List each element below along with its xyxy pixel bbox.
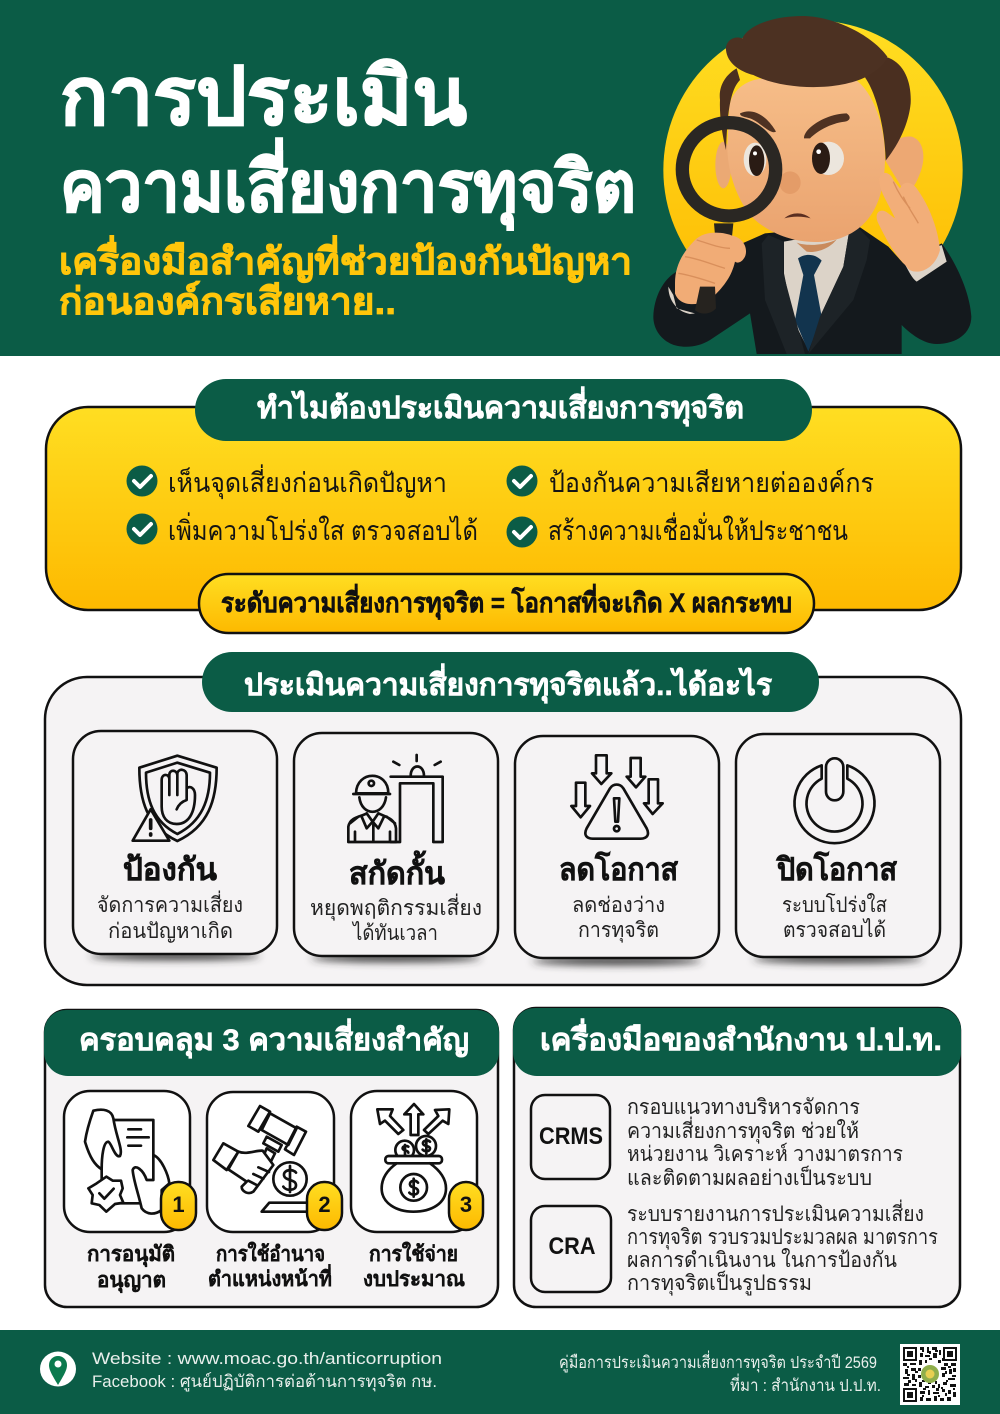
check item 4 [506, 512, 848, 548]
contact text: Website : www.moac.go.th/anticorruption [92, 1349, 442, 1368]
card: deter [294, 733, 498, 962]
heading: benefits [202, 652, 819, 712]
CRMS description [627, 1096, 903, 1190]
tool: CRMS: CRMS [539, 1123, 603, 1150]
CRMS description: ความเสี่ยงการทุจริต ช่วยให้ [627, 1116, 859, 1144]
subtitle: เครื่องมือสำคัญที่ช่วยป้องกันปัญหา [59, 235, 632, 283]
CRA description: การทุจริตเป็นรูปธรรม [627, 1269, 812, 1296]
tool: CRMS [531, 1095, 903, 1190]
label 1: อนุญาต [97, 1269, 166, 1294]
heading: three risks [44, 1010, 499, 1076]
source text [559, 1350, 881, 1395]
label 2 [208, 1241, 332, 1291]
heading: why assess: ทำไมต้องประเมินความเสี่ยงการทุจริต [257, 386, 744, 427]
badge 3: 3 [460, 1192, 472, 1217]
panel: why assess [46, 379, 961, 633]
card text [97, 890, 243, 943]
CRMS description: และติดตามผลอย่างเป็นระบบ [627, 1164, 872, 1190]
label 1: การอนุมัติ [87, 1243, 175, 1268]
tool: CRA: CRA [548, 1233, 596, 1260]
contact text [92, 1349, 442, 1392]
CRA description [627, 1199, 938, 1296]
icon: security gate [348, 755, 443, 842]
contact text: Facebook : ศูนย์ปฏิบัติการต่อต้านการทุจริต กษ. [92, 1372, 437, 1392]
card text: ก่อนปัญหาเกิด [108, 920, 233, 943]
panel: benefits [45, 652, 961, 985]
footer [0, 1330, 1000, 1414]
card text [310, 893, 482, 945]
card title: สกัดกั้น [349, 850, 445, 891]
badge 1 [161, 1182, 196, 1230]
label 2: ตำแหน่งหน้าที่ [208, 1263, 332, 1291]
tool: CRA [531, 1199, 938, 1296]
icon: approval document [85, 1110, 169, 1214]
risk card 2 [207, 1092, 342, 1291]
title: การประเมิน [60, 52, 467, 141]
card title: ป้องกัน [123, 852, 217, 887]
card text: ระบบโปร่งใส [782, 893, 887, 917]
card text: การทุจริต [578, 919, 659, 943]
icon: gavel and money [213, 1106, 310, 1212]
check item 1 [126, 464, 447, 500]
card text [572, 894, 665, 943]
icon: money bag with arrows [377, 1104, 449, 1212]
card text: ได้ทันเวลา [351, 921, 438, 945]
check item 1: เห็นจุดเสี่ยงก่อนเกิดปัญหา [168, 464, 447, 500]
risk card 1 [64, 1091, 196, 1294]
formula pill: ระดับความเสี่ยงการทุจริต = โอกาสที่จะเกิด X ผลกระทบ [221, 583, 792, 620]
card: reduce [515, 736, 719, 965]
risk card 3 [351, 1091, 483, 1291]
QR code [900, 1344, 960, 1405]
subtitle [59, 235, 632, 322]
heading: three risks: ครอบคลุม 3 ความเสี่ยงสำคัญ [79, 1018, 469, 1059]
label 3 [363, 1241, 466, 1291]
CRA description: ระบบรายงานการประเมินความเสี่ยง [627, 1199, 924, 1226]
label 3: การใช้จ่าย [369, 1241, 458, 1266]
card: close [736, 734, 940, 963]
badge 2 [307, 1182, 342, 1230]
icon: warning with arrows [571, 755, 663, 839]
badge 2: 2 [318, 1192, 331, 1217]
icon: shield hand [133, 756, 217, 841]
check item 3: เพิ่มความโปร่งใส ตรวจสอบได้ [168, 512, 478, 546]
title [60, 52, 636, 231]
check list [126, 464, 874, 548]
source text: คู่มือการประเมินความเสี่ยงการทุจริต ประจำปี 2569 [559, 1350, 877, 1373]
check item 2: ป้องกันความเสียหายต่อองค์กร [549, 467, 874, 498]
card text: หยุดพฤติกรรมเสี่ยง [310, 893, 482, 921]
subtitle: ก่อนองค์กรเสียหาย.. [59, 281, 396, 322]
heading: benefits: ประเมินความเสี่ยงการทุจริตแล้ว..ได้อะไร [244, 663, 772, 704]
formula pill [199, 574, 814, 633]
source text: ที่มา : สำนักงาน ป.ป.ท. [730, 1373, 881, 1395]
check item 4: สร้างความเชื่อมั่นให้ประชาชน [548, 512, 848, 546]
card: prevent [73, 731, 277, 960]
heading: tools: เครื่องมือของสำนักงาน ป.ป.ท. [540, 1018, 942, 1057]
card text: ลดช่องว่าง [572, 894, 665, 917]
icon: power [794, 758, 874, 843]
label 2: การใช้อำนาจ [216, 1241, 325, 1266]
heading: tools [513, 1008, 961, 1076]
card text: จัดการความเสี่ยง [97, 890, 243, 917]
title: ความเสี่ยงการทุจริต [60, 137, 636, 231]
panel: tools [513, 1008, 961, 1307]
heading: why assess [195, 379, 812, 441]
label 1 [87, 1243, 175, 1294]
illustration: man with magnifying glass [653, 16, 971, 354]
badge 1: 1 [172, 1192, 185, 1217]
card text: ตรวจสอบได้ [783, 918, 886, 942]
CRA description: ผลการดำเนินงาน ในการป้องกัน [627, 1248, 897, 1272]
card title: ลดโอกาส [559, 851, 678, 887]
header band [0, 0, 1000, 356]
panel: three key risks [44, 1010, 499, 1307]
badge 3 [449, 1182, 483, 1230]
label 3: งบประมาณ [363, 1268, 466, 1291]
CRMS description: กรอบแนวทางบริหารจัดการ [627, 1096, 860, 1119]
card title: ปิดโอกาส [776, 851, 897, 887]
CRA description: การทุจริต รวบรวมประมวลผล มาตรการ [627, 1226, 938, 1250]
card text [782, 893, 887, 942]
CRMS description: หน่วยงาน วิเคราะห์ วางมาตรการ [627, 1142, 903, 1166]
icon: location pin [40, 1352, 76, 1386]
